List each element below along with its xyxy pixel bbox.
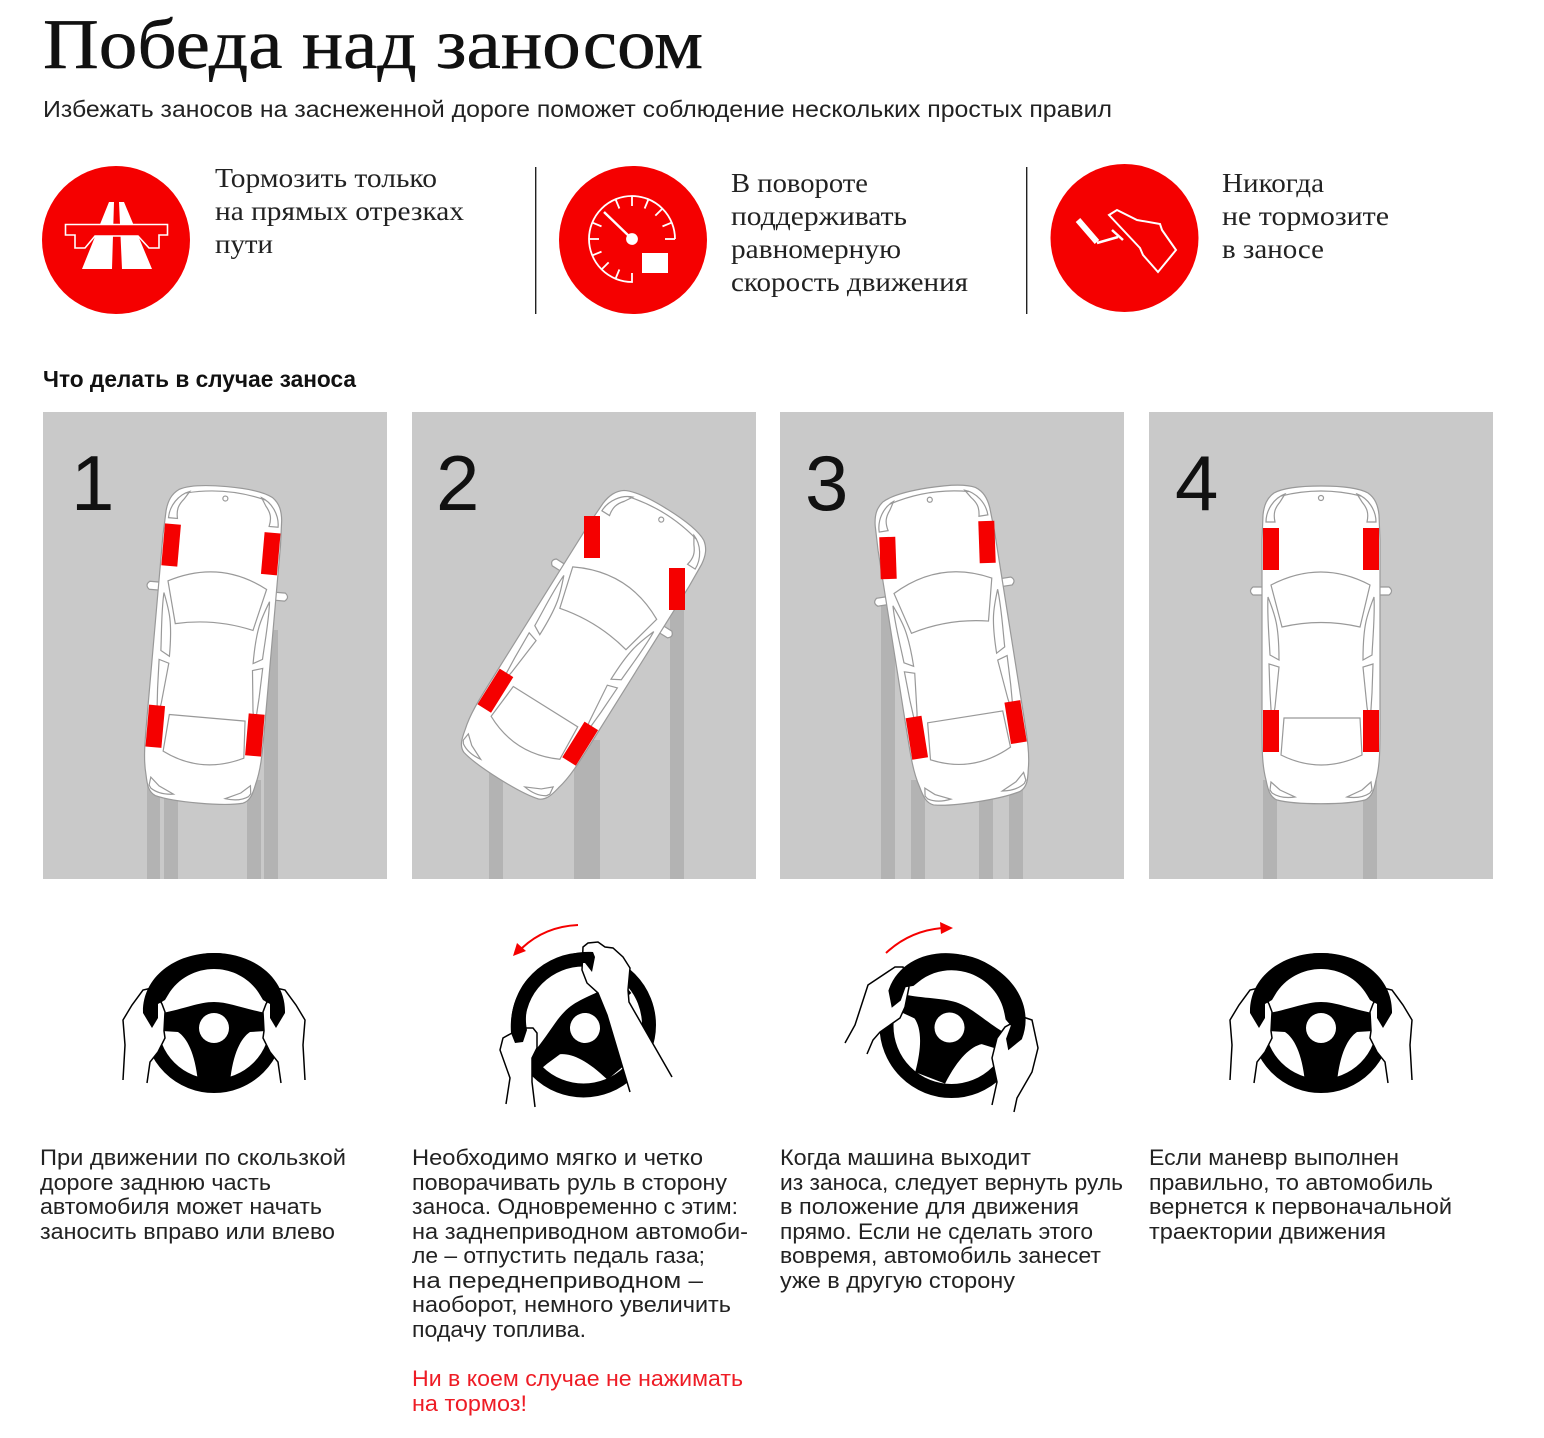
car 2 xyxy=(439,472,727,816)
steering wheel 2 with hands xyxy=(500,942,672,1107)
rule 3: never brake in skid xyxy=(1050,164,1389,312)
steering wheel 3 with hands xyxy=(845,934,1042,1112)
number 4: 4 xyxy=(1175,439,1218,527)
arrow: turn left xyxy=(513,925,578,956)
warning text: на тормоз! xyxy=(412,1391,527,1416)
panel: step 3 car xyxy=(780,412,1124,879)
text: step 4: траектории движения xyxy=(1149,1219,1386,1244)
panel: step 4 car xyxy=(1149,412,1493,879)
subtitle: Избежать заносов на заснеженной дороге поможет соблюдение нескольких простых правил xyxy=(43,96,1112,122)
warning text: Ни в коем случае не нажимать xyxy=(412,1366,743,1391)
text: step 1: автомобиля может начать xyxy=(40,1194,322,1219)
text: rule 1: пути xyxy=(215,229,273,259)
text: step 1: При движении по скользкой xyxy=(40,1145,346,1170)
text: step 2: ле – отпустить педаль газа; xyxy=(412,1243,705,1268)
text: step 4: правильно, то автомобиль xyxy=(1149,1170,1433,1195)
text: rule 1 xyxy=(215,163,465,259)
text: step 4 xyxy=(1149,1145,1452,1244)
car 4 xyxy=(1250,486,1392,804)
text: rule 2: поддерживать xyxy=(731,201,907,231)
text: step 4: вернется к первоначальной xyxy=(1149,1194,1452,1219)
text: step 2: наоборот, немного увеличить xyxy=(412,1292,731,1317)
text: step 3 xyxy=(780,1145,1123,1293)
text: rule 3 xyxy=(1222,168,1389,264)
text: rule 3: не тормозите xyxy=(1222,201,1389,231)
text: step 3: вовремя, автомобиль занесет xyxy=(780,1243,1101,1268)
text: step 2: на переднеприводном – xyxy=(412,1268,704,1293)
text: rule 1: Тормозить только xyxy=(215,163,437,193)
text: step 2 xyxy=(412,1145,748,1342)
text: step 2: заноса. Одновременно с этим: xyxy=(412,1194,738,1219)
text: step 2: подачу топлива. xyxy=(412,1317,586,1342)
steering wheel 1 xyxy=(123,953,305,1086)
text: rule 2: скорость движения xyxy=(731,267,968,297)
text: rule 3: Никогда xyxy=(1222,168,1324,198)
rule 2: keep constant speed in turn xyxy=(559,166,968,314)
text: step 1 xyxy=(40,1145,346,1244)
text: step 4: Если маневр выполнен xyxy=(1149,1145,1399,1170)
arrow: turn right xyxy=(886,922,953,953)
text: step 2: на заднеприводном автомоби- xyxy=(412,1219,748,1244)
number 1: 1 xyxy=(71,439,114,527)
icon: highway xyxy=(42,166,190,314)
number 2: 2 xyxy=(436,439,479,527)
text: rule 3: в заносе xyxy=(1222,234,1324,264)
icon: speedometer xyxy=(559,166,707,314)
text: rule 2 xyxy=(731,168,968,297)
number 3: 3 xyxy=(805,439,848,527)
panel: step 2 car xyxy=(412,412,756,879)
text: step 1: дороге заднюю часть xyxy=(40,1170,271,1195)
text: step 3: прямо. Если не сделать этого xyxy=(780,1219,1093,1244)
text: step 3: уже в другую сторону xyxy=(780,1268,1015,1293)
text: step 3: в положение для движения xyxy=(780,1194,1079,1219)
section heading: Что делать в случае заноса xyxy=(43,366,356,392)
icon: foot on pedal xyxy=(1050,164,1198,312)
text: step 1: заносить вправо или влево xyxy=(40,1219,335,1244)
text: step 3: из заноса, следует вернуть руль xyxy=(780,1170,1123,1195)
text: step 2: Необходимо мягко и четко xyxy=(412,1145,703,1170)
text: step 3: Когда машина выходит xyxy=(780,1145,1031,1170)
steering wheel 4 xyxy=(1230,953,1412,1086)
rule 1: brake on straight road xyxy=(42,163,465,314)
warning text xyxy=(412,1366,743,1416)
text: rule 1: на прямых отрезках xyxy=(215,196,465,226)
text: rule 2: В повороте xyxy=(731,168,868,198)
car 3 xyxy=(858,477,1047,813)
text: rule 2: равномерную xyxy=(731,234,901,264)
panel: step 1 car xyxy=(43,412,387,879)
title: Победа над заносом xyxy=(43,6,703,84)
text: step 2: поворачивать руль в сторону xyxy=(412,1170,727,1195)
car 1 xyxy=(128,480,297,809)
